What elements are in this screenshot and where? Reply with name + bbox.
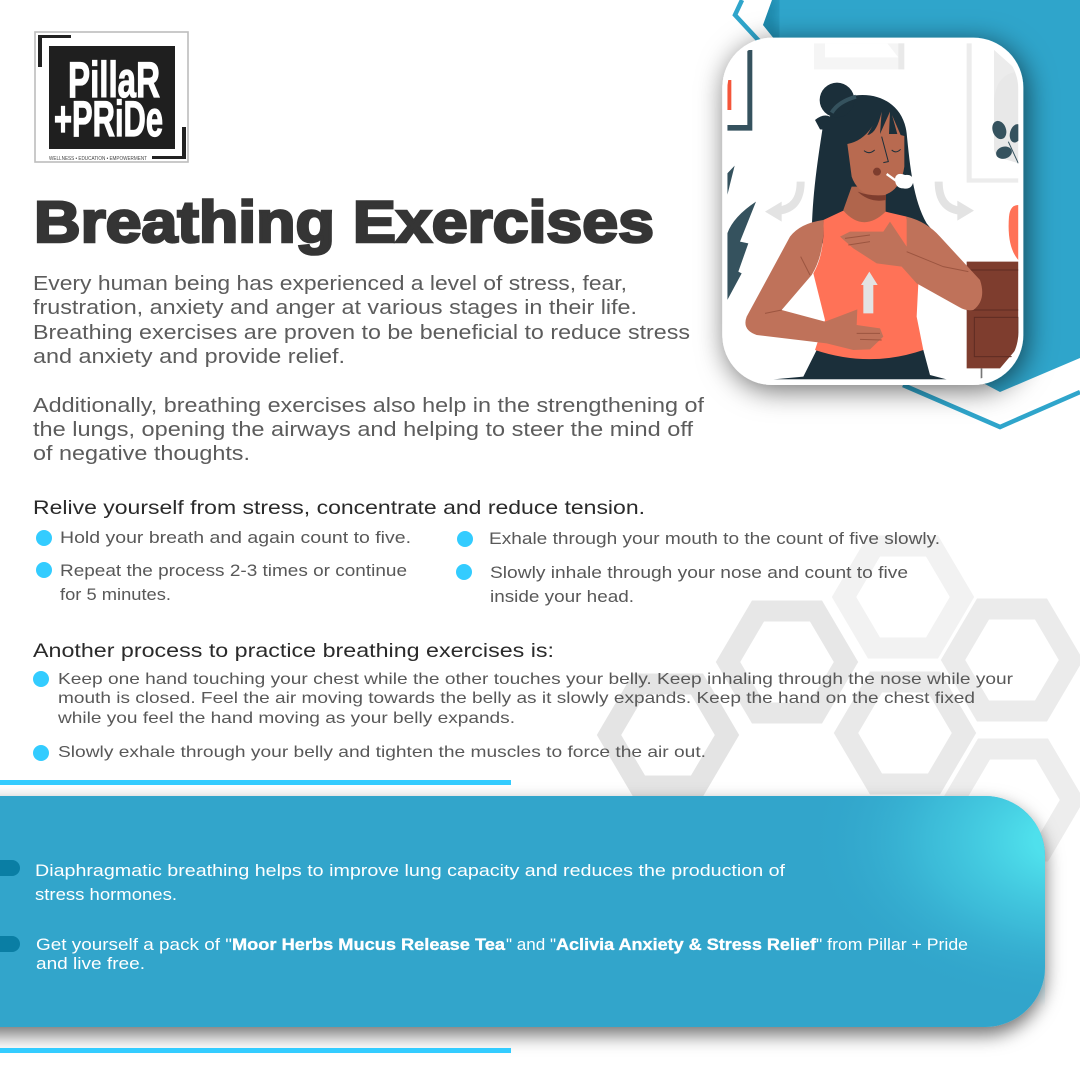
second process list: Slowly exhale through your belly and tighten the muscles to force the air out.: [58, 744, 706, 761]
illustration card: woman breathing: [722, 38, 1024, 385]
logo: [35, 32, 188, 162]
panel text two: Moor Herbs Mucus Release Tea: [232, 935, 506, 954]
intro paragraph one: Breathing exercises are proven to be beneficial to reduce stress: [33, 322, 690, 344]
second process list: mouth is closed. Feel the air moving towards the belly as it slowly expands. Keep the hand on the chest fixed: [58, 690, 975, 707]
intro paragraph two: [33, 395, 705, 465]
title: Breathing Exercises: [34, 190, 654, 255]
intro paragraph two: of negative thoughts.: [33, 443, 250, 465]
panel text two: " and ": [506, 935, 556, 954]
logo: +PRiDe: [54, 91, 163, 147]
panel bullet one: [0, 860, 20, 876]
second process list: [33, 671, 1014, 761]
logo: WELLNESS • EDUCATION • EMPOWERMENT: [49, 156, 147, 162]
logo: PillaR: [68, 52, 160, 108]
steps list right column: Exhale through your mouth to the count of five slowly.: [489, 529, 940, 548]
panel text two: and live free.: [36, 954, 145, 973]
steps list right column: [456, 529, 940, 606]
section heading: relive: Relive yourself from stress, concentrate and reduce tension.: [33, 497, 645, 519]
steps list right column: Slowly inhale through your nose and count to five: [490, 563, 908, 582]
intro paragraph one: [33, 273, 690, 368]
steps list left column: [36, 528, 411, 604]
panel text two: Aclivia Anxiety & Stress Relief: [556, 935, 816, 954]
section heading: another process: Another process to practice breathing exercises is:: [33, 640, 554, 662]
panel text one: Diaphragmatic breathing helps to improve lung capacity and reduces the production of: [35, 861, 785, 880]
blue callout panel: [0, 796, 1045, 1027]
hexagon background pattern: [609, 546, 1072, 851]
intro paragraph two: Additionally, breathing exercises also help in the strengthening of: [33, 395, 705, 417]
panel text two: " from Pillar + Pride: [816, 935, 968, 954]
intro paragraph one: and anxiety and provide relief.: [33, 346, 345, 368]
steps list left column: for 5 minutes.: [60, 585, 171, 604]
divider line top: [0, 780, 511, 785]
steps list left column: Hold your breath and again count to five.: [60, 528, 411, 547]
intro paragraph one: frustration, anxiety and anger at various stages in their life.: [33, 297, 637, 319]
panel text one: stress hormones.: [35, 885, 177, 904]
panel text one: [35, 861, 785, 904]
panel text two: [36, 935, 968, 973]
blue shield shape top right: [735, 0, 1080, 427]
panel bullet two: [0, 936, 20, 952]
intro paragraph two: the lungs, opening the airways and helping to steer the mind off: [33, 419, 694, 441]
steps list right column: inside your head.: [490, 587, 634, 606]
second process list: while you feel the hand moving as your belly expands.: [57, 710, 515, 727]
steps list left column: Repeat the process 2-3 times or continue: [60, 561, 407, 580]
second process list: Keep one hand touching your chest while the other touches your belly. Keep inhaling through the nose while your: [58, 671, 1014, 688]
intro paragraph one: Every human being has experienced a level of stress, fear,: [33, 273, 627, 295]
panel text two: Get yourself a pack of ": [36, 935, 232, 954]
divider line bottom: [0, 1048, 511, 1053]
